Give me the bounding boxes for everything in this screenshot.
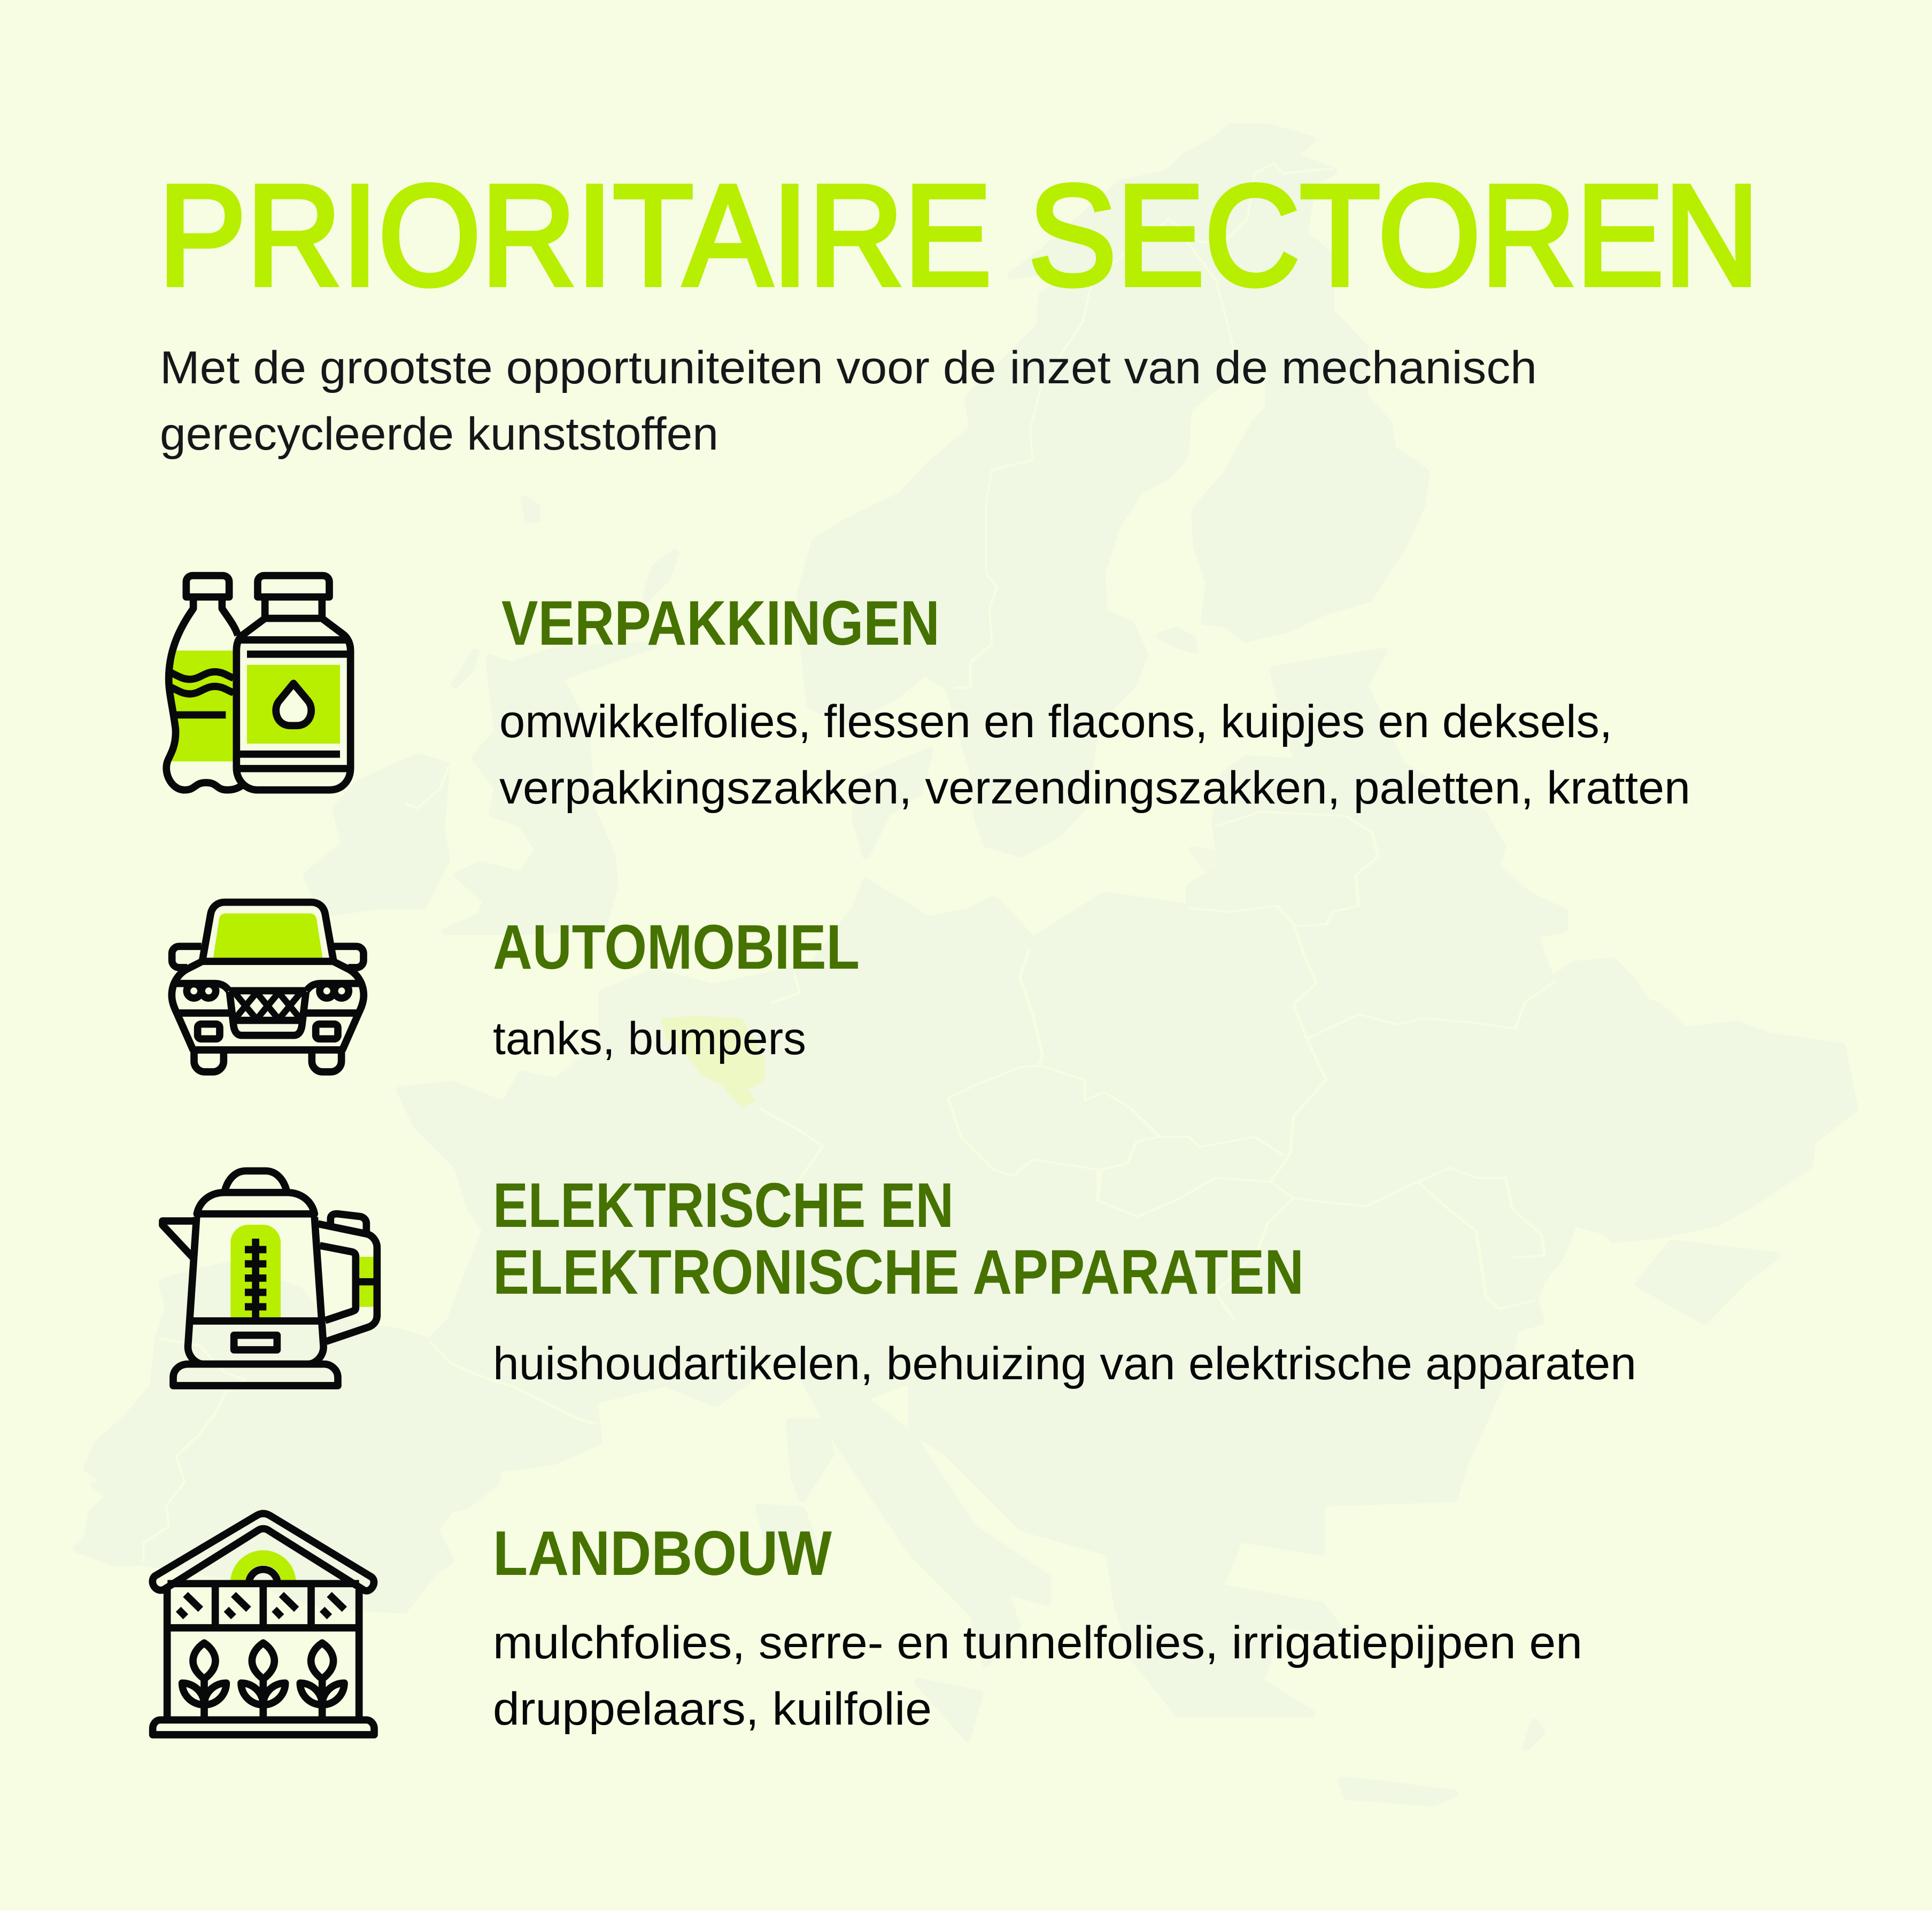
section: elektrische en elektronische apparaten: huishoudartikelen, behuizing van elektrische apparaten <box>493 1338 1636 1389</box>
subtitle <box>160 342 1537 460</box>
section: landbouw: mulchfolies, serre- en tunnelfolies, irrigatiepijpen en <box>493 1617 1582 1668</box>
section: landbouw: LANDBOUW <box>493 1518 832 1589</box>
section: elektrische en elektronische apparaten: ELEKTRONISCHE APPARATEN <box>493 1237 1304 1308</box>
section: landbouw: druppelaars, kuilfolie <box>493 1683 932 1735</box>
section: elektrische en elektronische apparaten: ELEKTRISCHE EN <box>493 1170 954 1241</box>
section: automobiel: AUTOMOBIEL <box>493 912 860 983</box>
section: verpakkingen: verpakkingszakken, verzendingszakken, paletten, kratten <box>499 762 1690 814</box>
section: verpakkingen: VERPAKKINGEN <box>501 588 940 659</box>
icon: greenhouse <box>152 1513 374 1735</box>
section: landbouw <box>493 1518 1582 1735</box>
background map of Europe <box>77 127 1854 1803</box>
section: elektrische en elektronische apparaten <box>493 1170 1636 1389</box>
icon: bottles <box>166 576 351 790</box>
icon: car <box>172 902 364 1072</box>
Belgium highlight <box>661 1016 765 1108</box>
title: PRIORITAIRE SECTOREN <box>158 155 1759 315</box>
country borders <box>143 163 1555 1562</box>
section: automobiel <box>493 912 860 1064</box>
section: automobiel: tanks, bumpers <box>493 1013 806 1064</box>
section: verpakkingen: omwikkelfolies, flessen en flacons, kuipjes en deksels, <box>499 696 1612 747</box>
subtitle: gerecycleerde kunststoffen <box>160 408 718 460</box>
icon: kettle <box>163 1171 377 1386</box>
subtitle: Met de grootste opportuniteiten voor de inzet van de mechanisch <box>160 342 1537 393</box>
section: verpakkingen <box>499 588 1690 814</box>
